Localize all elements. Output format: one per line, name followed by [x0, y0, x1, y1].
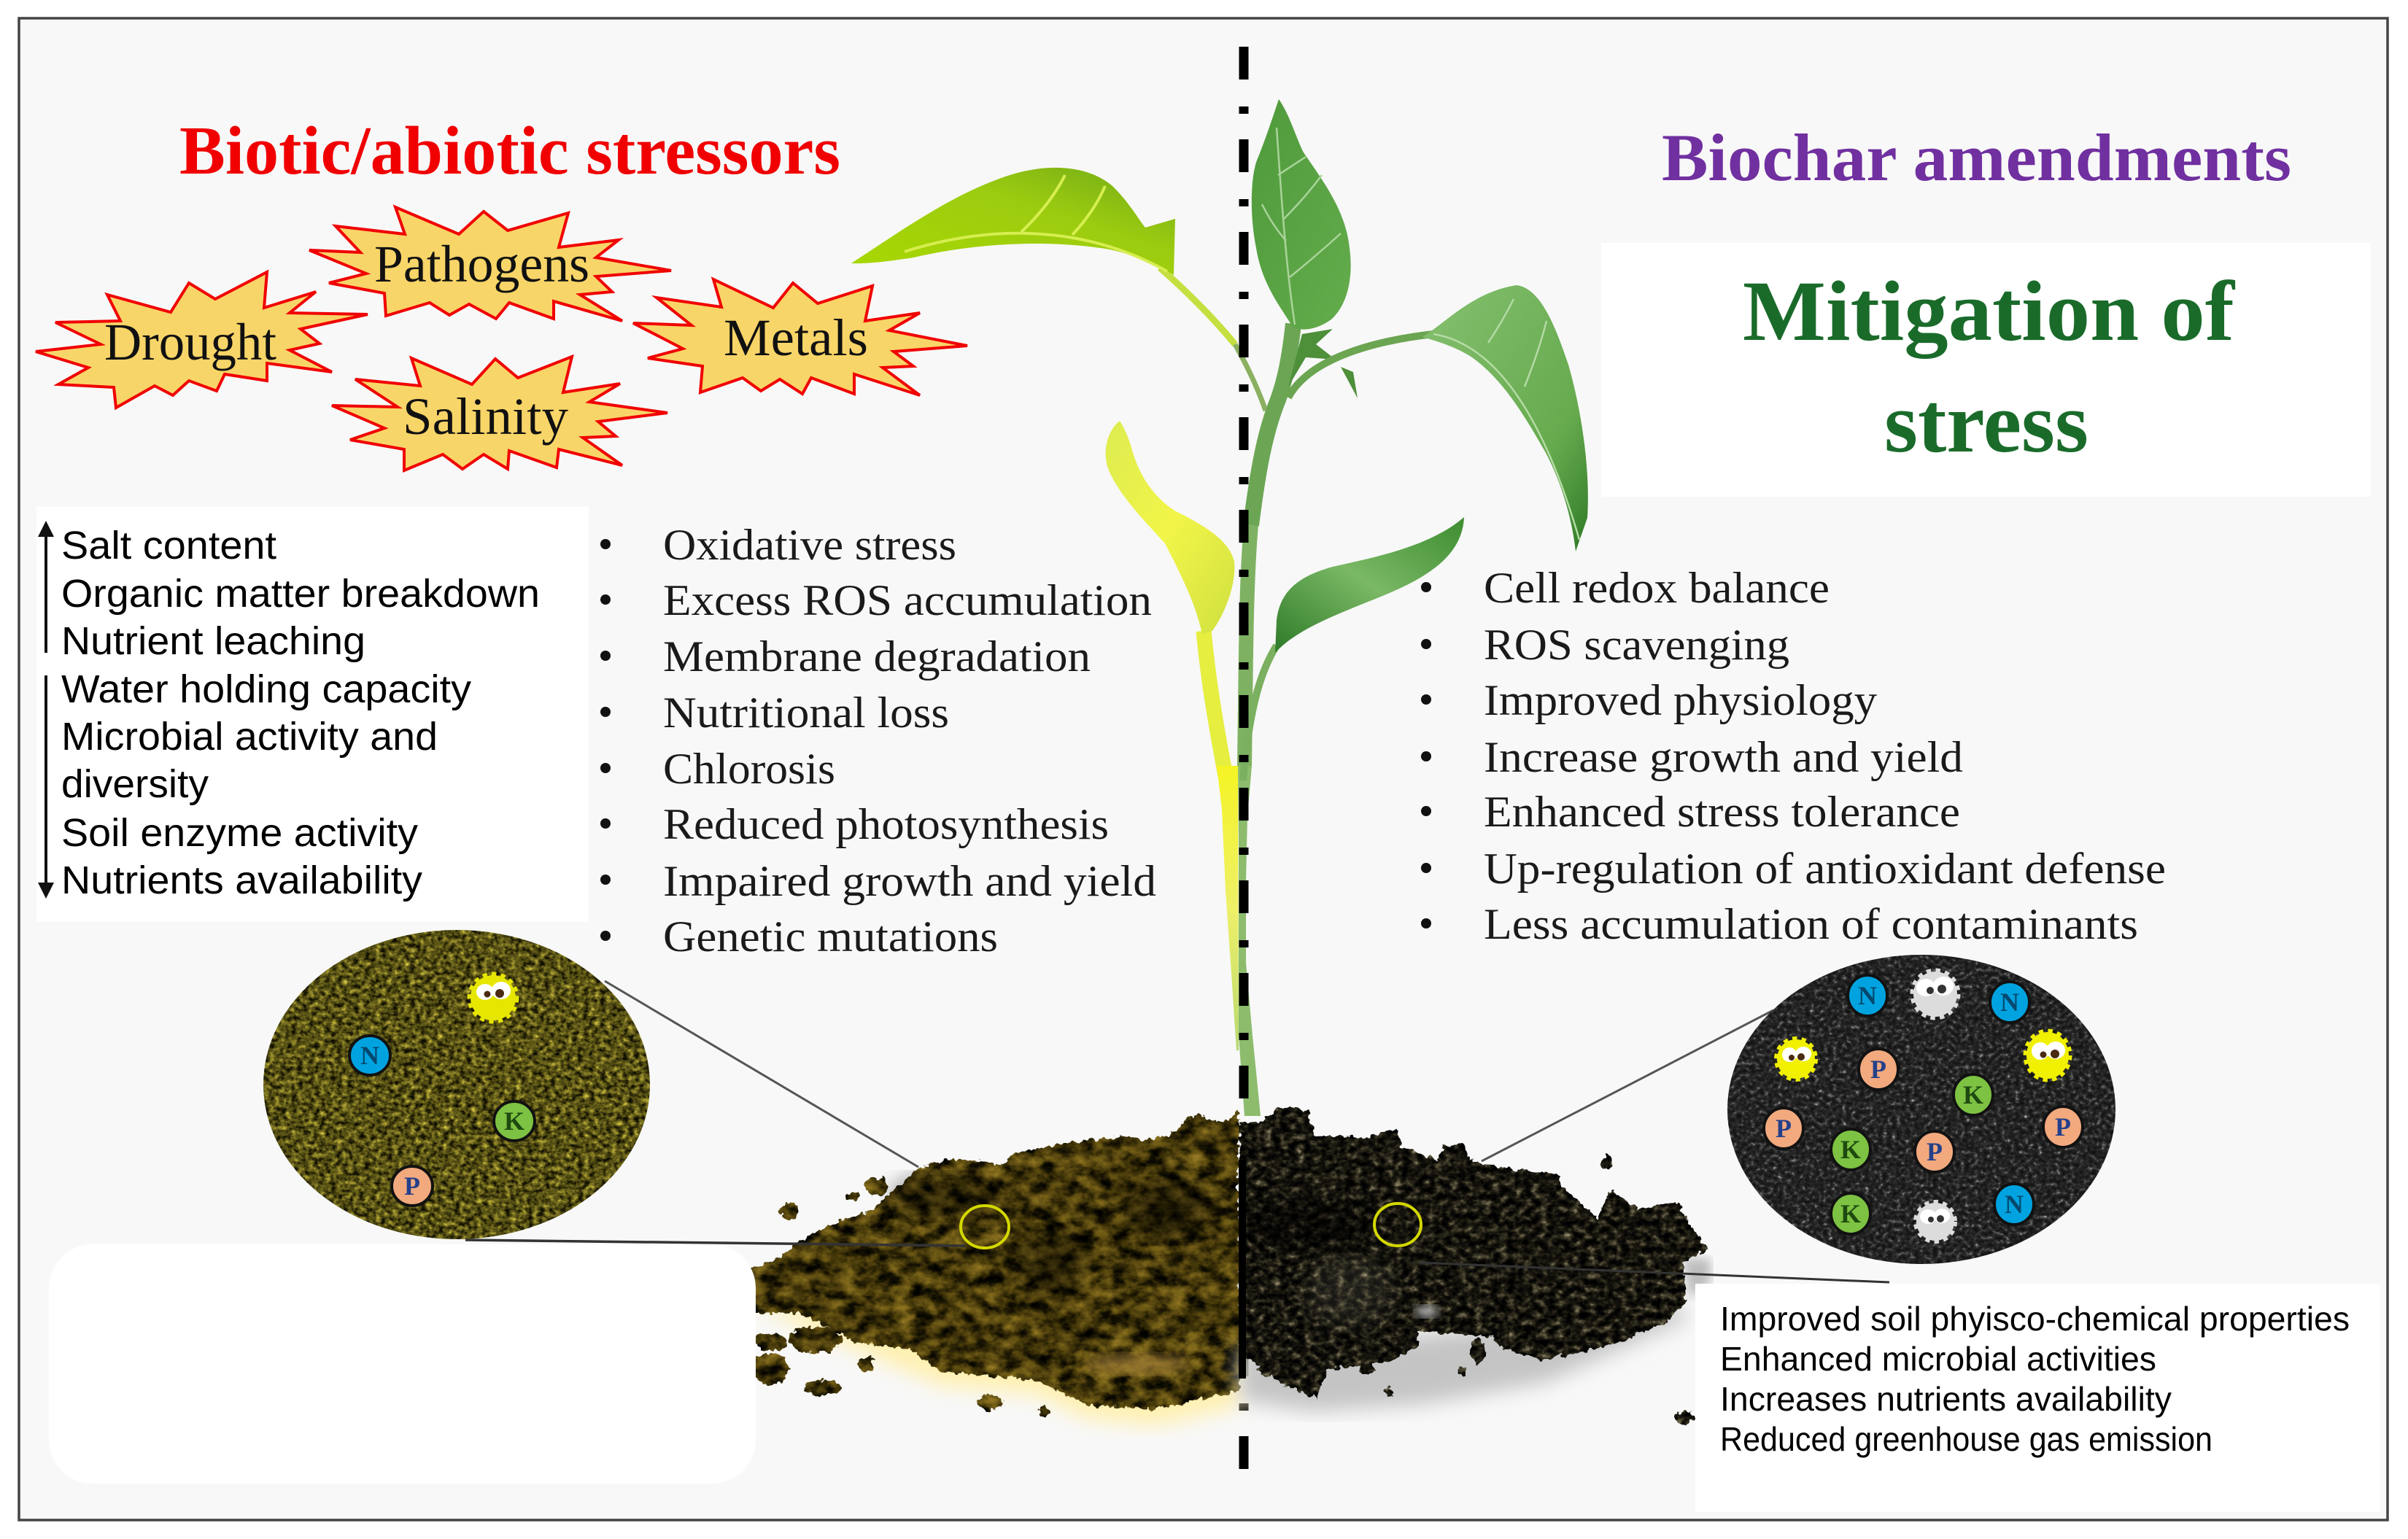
icon: yellow microbe — [471, 975, 516, 1020]
connector: right circle to soil — [1482, 1010, 1773, 1161]
stressor burst: salinity — [332, 357, 667, 470]
blank rounded panel — [49, 1244, 756, 1484]
list: stress effects: Nutritional loss — [663, 689, 949, 737]
connector: left circle to soil — [605, 981, 918, 1167]
nutrients: potassium: K — [1840, 1199, 1861, 1228]
stressor burst: salinity: Salinity — [403, 387, 568, 446]
nutrient: N: N — [360, 1041, 379, 1070]
list: stress effects: Impaired growth and yield — [663, 857, 1156, 905]
nutrients: potassium — [1831, 1074, 1993, 1234]
nutrient: P: P — [404, 1171, 420, 1201]
list: biochar benefits: Less accumulation of contaminants — [1484, 900, 2138, 948]
leaf: right arching — [1288, 285, 1588, 551]
connector: right box top into soil — [1419, 1263, 1889, 1282]
nutrients: phosphorus: P — [2055, 1112, 2071, 1141]
nutrients: phosphorus: P — [1776, 1114, 1792, 1143]
nutrient: K: K — [504, 1106, 524, 1136]
list: biochar benefits: Cell redox balance — [1484, 564, 1830, 612]
nutrient: P — [392, 1166, 433, 1206]
heading: biochar amendments: Biochar amendments — [1662, 120, 2291, 195]
nutrient: K — [494, 1101, 535, 1141]
small sprouting leaves — [1288, 329, 1358, 398]
arrow: decrease — [38, 675, 54, 899]
soil property list: Organic matter breakdown — [61, 572, 540, 616]
heading: biotic/abiotic stressors: Biotic/abiotic stressors — [179, 113, 840, 189]
icon: grey microbe bottom — [1916, 1203, 1954, 1241]
list: biochar benefits: Up-regulation of antioxidant defense — [1484, 845, 2166, 893]
stressor burst: pathogens — [309, 207, 671, 321]
nutrients: potassium: K — [1840, 1135, 1861, 1164]
stressor burst: pathogens: Pathogens — [374, 235, 589, 293]
panel: soil property changes under stress — [36, 507, 589, 922]
stressor burst: drought — [36, 272, 368, 408]
nutrients: nitrogen: N — [2005, 1190, 2024, 1219]
icon: grey microbe top — [1913, 972, 1957, 1017]
list: stress effects: Oxidative stress — [663, 521, 956, 569]
connector: left circle base into soil — [465, 1240, 965, 1246]
soil property list: Nutrients availability — [61, 858, 422, 902]
nutrients: nitrogen: N — [2000, 988, 2019, 1017]
leaf: yellowing lower left with yellow petiole — [1106, 421, 1234, 784]
panel: soil improvements: Reduced greenhouse gas emission — [1720, 1420, 2213, 1458]
soil pile: biochar amended — [1239, 1106, 1711, 1423]
leaf: top green — [1252, 99, 1351, 330]
stressor burst: metals: Metals — [724, 309, 868, 367]
nutrients: phosphorus: P — [1927, 1137, 1943, 1166]
panel: mitigation of stress — [1601, 243, 2371, 497]
list: biochar benefits — [1421, 564, 2166, 948]
panel: mitigation of stress: Mitigation of — [1743, 263, 2236, 359]
leaf: lower right — [1243, 517, 1464, 780]
selection ring: biochar soil — [1374, 1203, 1421, 1246]
panel: soil improvements: Increases nutrients availability — [1720, 1380, 2172, 1418]
selection ring: untreated soil — [961, 1206, 1009, 1248]
icon: yellow microbe right — [2026, 1032, 2069, 1079]
panel: mitigation of stress: stress — [1884, 375, 2088, 470]
nutrients: phosphorus — [1764, 1049, 2083, 1172]
list: biochar benefits: ROS scavenging — [1484, 621, 1789, 669]
nutrients: phosphorus: P — [1870, 1055, 1886, 1084]
nutrients: nitrogen: N — [1858, 981, 1877, 1010]
soil property list: Microbial activity and — [61, 715, 438, 759]
list: stress effects — [600, 521, 1156, 961]
soil property list: Soil enzyme activity — [61, 811, 418, 855]
list: biochar benefits: Improved physiology — [1484, 676, 1877, 724]
leaf: lime upper left — [851, 168, 1266, 411]
arrow: increase — [38, 521, 54, 653]
centre dash-dot divider — [1239, 47, 1249, 1469]
soil property list: Nutrient leaching — [61, 619, 365, 663]
stem — [1217, 324, 1293, 1116]
list: stress effects: Genetic mutations — [663, 912, 998, 961]
magnified circle: untreated soil with few nutrients — [263, 930, 650, 1239]
magnified circle: biochar soil with many nutrients — [1727, 955, 2115, 1264]
list: biochar benefits: Enhanced stress tolerance — [1484, 788, 1960, 836]
list: biochar benefits: Increase growth and yield — [1484, 733, 1963, 781]
panel: soil improvements: Improved soil phyisco-chemical properties — [1720, 1300, 2350, 1338]
panel: soil improvements — [1695, 1284, 2380, 1512]
list: stress effects: Reduced photosynthesis — [663, 800, 1109, 848]
list: stress effects: Excess ROS accumulation — [663, 576, 1152, 624]
plant: stressed left side and healthy right side — [851, 99, 1588, 1116]
nutrient: N — [349, 1036, 390, 1075]
soil property list — [61, 524, 540, 902]
soil property list: Salt content — [61, 524, 276, 567]
stressor burst: drought: Drought — [104, 313, 276, 371]
icon: yellow microbe left — [1777, 1039, 1815, 1079]
nutrients: potassium: K — [1963, 1080, 1983, 1109]
soil property list: Water holding capacity — [61, 667, 471, 711]
stressor burst: metals — [633, 279, 967, 395]
soil property list: diversity — [61, 762, 209, 806]
soil pile: untreated — [748, 1111, 1240, 1426]
panel: soil improvements: Enhanced microbial activities — [1720, 1340, 2156, 1378]
list: stress effects: Membrane degradation — [663, 632, 1091, 681]
list: stress effects: Chlorosis — [663, 745, 835, 793]
nutrients: nitrogen — [1848, 975, 2034, 1225]
